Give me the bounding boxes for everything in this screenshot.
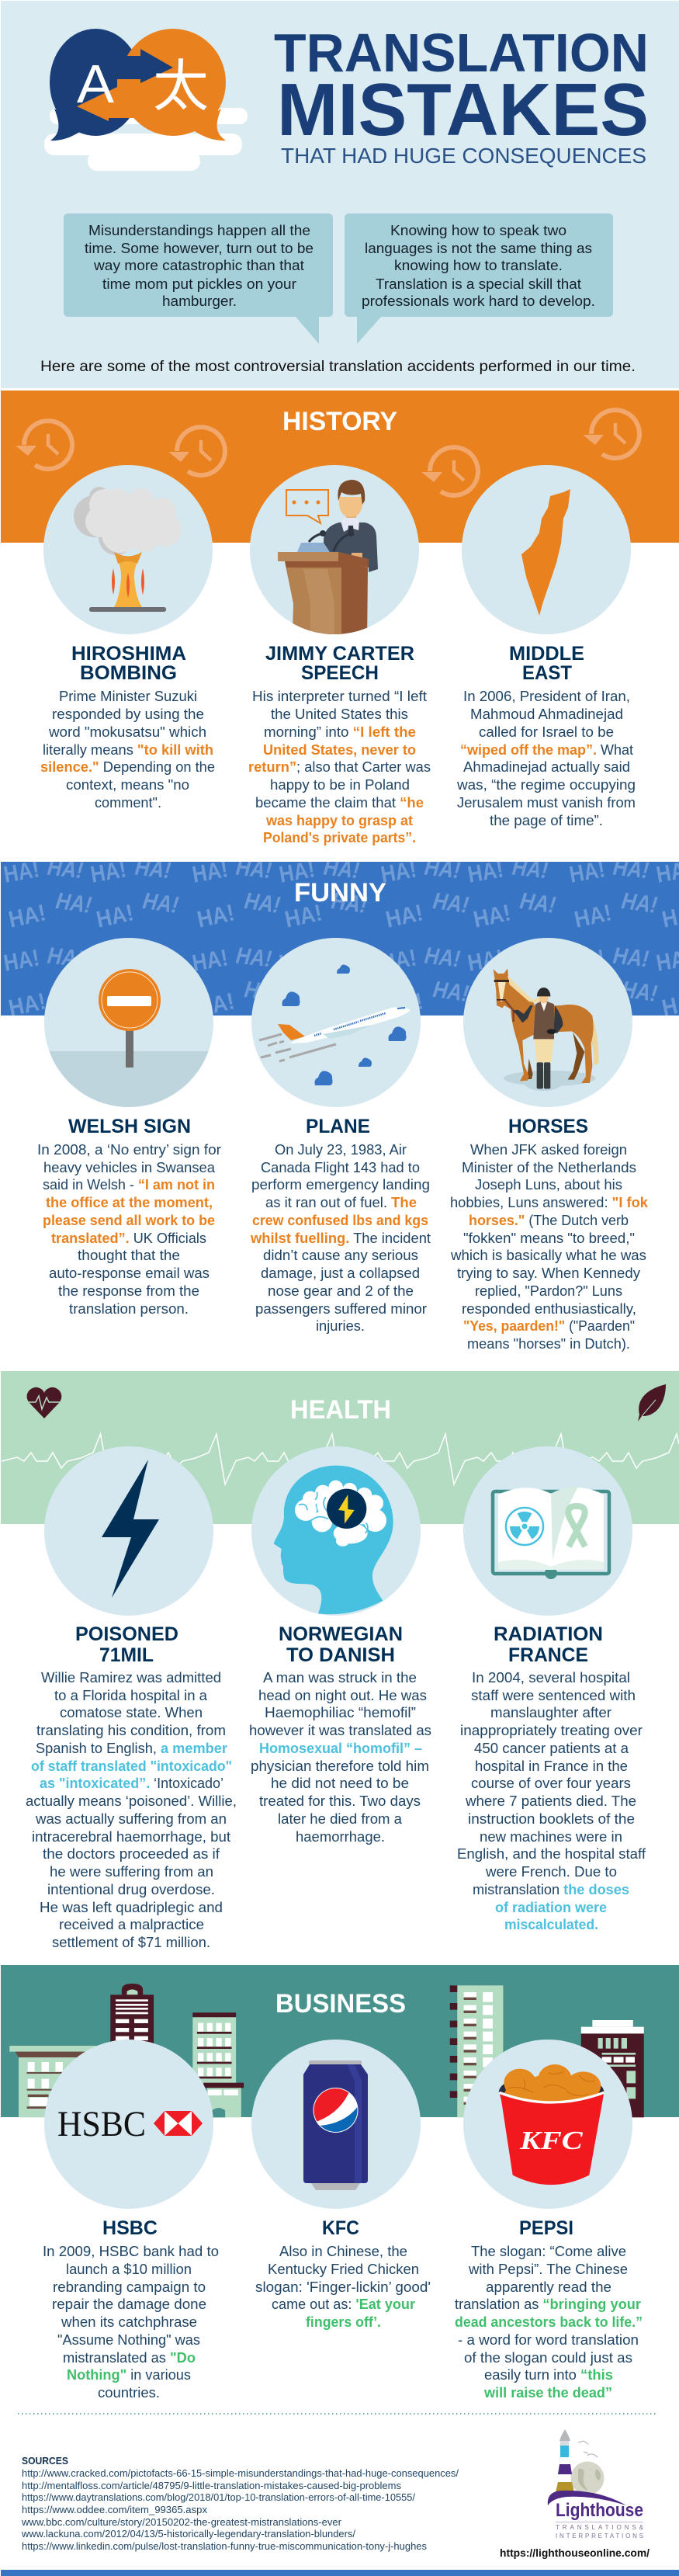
text: Norwegian to Danish: treated for this. Two days xyxy=(259,1793,421,1809)
icon: KFC bucket: KFC xyxy=(519,2126,584,2155)
icon: translation speech bubbles: A xyxy=(77,54,114,114)
title: THAT HAD HUGE CONSEQUENCES xyxy=(281,144,646,168)
heading: Norwegian to Danish xyxy=(279,1623,403,1666)
text: Plane: passengers suffered minor xyxy=(255,1301,427,1317)
text: Poisoned 71mil: Spanish to English, a member xyxy=(36,1741,227,1756)
text: Pepsi: apparently read the xyxy=(486,2279,611,2295)
text: Plane: Canada Flight 143 had to xyxy=(261,1160,420,1175)
sources list: http://www.cracked.com/pictofacts-66-15-simple-misunderstandings-that-had-huge-consequences/ xyxy=(22,2468,459,2479)
text: KFC: Kentucky Fried Chicken xyxy=(268,2262,419,2277)
text: Horses: hobbies, Luns answered: "I fok xyxy=(450,1195,649,1210)
text: KFC xyxy=(255,2244,431,2330)
icon: heart with pulse xyxy=(27,1387,61,1418)
text: HSBC xyxy=(43,2244,219,2401)
text: Pepsi: - a word for word translation xyxy=(458,2332,639,2348)
text: Poisoned 71mil: of staff translated "intoxicado" xyxy=(31,1758,232,1774)
sources list: https://www.oddee.com/item_99365.aspx xyxy=(22,2505,208,2515)
heading: Hiroshima bombing: HIROSHIMA xyxy=(71,643,186,665)
text: Radiation France: English, and the hospital staff xyxy=(457,1846,646,1862)
text: Middle East: Mahmoud Ahmadinejad xyxy=(470,706,623,722)
heading: Middle East: MIDDLE xyxy=(509,643,584,665)
business band xyxy=(1,1965,679,2117)
text: Plane: On July 23, 1983, Air xyxy=(275,1142,407,1158)
text: Poisoned 71mil: the doctors proceeded as if xyxy=(43,1846,220,1862)
text: Poisoned 71mil: to a Florida hospital in a xyxy=(54,1688,208,1703)
callout: misunderstandings xyxy=(64,214,333,344)
text: Welsh sign: auto-response email was xyxy=(49,1265,210,1281)
icon: translation speech bubbles: 太 xyxy=(153,56,209,118)
text: Pepsi: dead ancestors back to life.” xyxy=(455,2314,643,2330)
text: Poisoned 71mil: settlement of $71 million. xyxy=(52,1935,210,1950)
text: Radiation France xyxy=(457,1670,646,1932)
text: Norwegian to Danish: A man was struck in the xyxy=(263,1670,417,1686)
text: Poisoned 71mil xyxy=(26,1670,237,1950)
health band xyxy=(1,1371,679,1524)
text: Welsh sign: thought that the xyxy=(78,1248,180,1263)
heading: Plane: PLANE xyxy=(306,1116,370,1137)
text: Horses: "fokken" means "to breed," xyxy=(463,1231,635,1246)
text: Norwegian to Danish: Haemophiliac “hemofil” xyxy=(265,1705,416,1720)
text: Radiation France: 450 cancer patients at a xyxy=(474,1741,629,1756)
text: Radiation France: manslaughter after xyxy=(490,1705,611,1720)
text: HSBC: when its catchphrase xyxy=(61,2314,197,2330)
sources list: http://mentalfloss.com/article/48795/9-little-translation-mistakes-caused-big-problems xyxy=(22,2481,401,2491)
text: Middle East xyxy=(456,689,636,828)
text: Welsh sign xyxy=(37,1142,221,1317)
text: Norwegian to Danish: haemorrhage. xyxy=(296,1829,385,1845)
icon: HSBC logo: HSBC xyxy=(57,2104,146,2144)
heading: Poisoned 71mil: POISONED xyxy=(75,1623,178,1645)
text: Hiroshima bombing: responded by using the xyxy=(52,706,204,722)
text: HSBC: launch a $10 million xyxy=(66,2262,192,2277)
text: Radiation France: mistranslation the doses xyxy=(473,1882,629,1897)
icon: map of Israel xyxy=(462,465,631,634)
text: Horses: means "horses" in Dutch). xyxy=(467,1336,630,1352)
heading: Horses: HORSES xyxy=(508,1116,588,1137)
callout: knowing two languages: Translation is a special skill that xyxy=(376,276,581,292)
text: Jimmy Carter speech xyxy=(248,689,431,845)
text: Jimmy Carter speech: became the claim that “he xyxy=(255,795,424,811)
text: Poisoned 71mil: intentional drug overdose. xyxy=(47,1882,215,1897)
icon: plane and clouds xyxy=(251,938,421,1107)
header background xyxy=(1,1,679,388)
text: Horses: "Yes, paarden!" ("Paarden" xyxy=(463,1318,635,1334)
text: Norwegian to Danish: physician therefore told him xyxy=(251,1758,429,1774)
text: Radiation France: of radiation were xyxy=(495,1900,607,1915)
heading: Hiroshima bombing: BOMBING xyxy=(80,662,177,684)
text: Welsh sign: heavy vehicles in Swansea xyxy=(43,1160,216,1175)
text: HSBC: In 2009, HSBC bank had to xyxy=(43,2244,219,2259)
callout: knowing two languages xyxy=(345,214,613,344)
title: MISTAKES xyxy=(277,68,649,151)
sources list: www.bbc.com/culture/story/20150202-the-greatest-mistranslations-ever xyxy=(21,2517,341,2528)
panel: history xyxy=(1,391,679,845)
icon: speaker at podium xyxy=(250,465,419,644)
text: Poisoned 71mil: was actually suffering from an xyxy=(35,1811,227,1827)
text: Horses: Minister of the Netherlands xyxy=(462,1160,636,1175)
health heading: HEALTH xyxy=(290,1395,391,1425)
callout: knowing two languages: knowing how to translate. xyxy=(394,258,563,273)
text: Jimmy Carter speech: return”; also that Carter was xyxy=(248,759,431,775)
logo: Lighthouse Translations and Interpretations: TRANSLATIONS& xyxy=(556,2524,644,2531)
business heading: BUSINESS xyxy=(275,1989,406,2019)
logo: Lighthouse Translations and Interpretations: Lighthouse xyxy=(556,2500,643,2521)
text: Welsh sign: said in Welsh - “I am not in xyxy=(43,1177,215,1193)
icon: HSBC logo xyxy=(44,2040,213,2209)
text: Welsh sign: please send all work to be xyxy=(43,1213,215,1228)
text: Poisoned 71mil: he were suffering from an xyxy=(50,1864,213,1880)
heading: Norwegian to Danish: NORWEGIAN xyxy=(279,1623,403,1645)
text: Hiroshima bombing: silence." Depending on the xyxy=(40,759,215,775)
text: Hiroshima bombing: word "mokusatsu" which xyxy=(48,724,206,740)
icon: no entry sign xyxy=(39,938,219,1113)
text: Jimmy Carter speech: was happy to grasp at xyxy=(265,813,413,828)
text: Radiation France: new machines were in xyxy=(480,1829,622,1845)
text: Poisoned 71mil: comatose state. When xyxy=(60,1705,203,1720)
text: HSBC: mistranslated as "Do xyxy=(63,2350,196,2366)
icon: mushroom cloud xyxy=(43,465,213,634)
text: Radiation France: In 2004, several hospital xyxy=(472,1670,630,1686)
text: Radiation France: where 7 patients died. The xyxy=(465,1793,636,1809)
text: Radiation France: miscalculated. xyxy=(504,1917,598,1932)
callout: misunderstandings: time. Some however, turn out to be xyxy=(85,241,314,256)
text: Welsh sign: the office at the moment, xyxy=(46,1195,213,1210)
icon: head with brain xyxy=(251,1446,421,1616)
icon: lightning bolt xyxy=(44,1446,213,1616)
text: Radiation France: course of over four years xyxy=(471,1776,631,1791)
text: Poisoned 71mil: He was left quadriplegic and xyxy=(40,1900,223,1915)
text: Poisoned 71mil: Willie Ramirez was admitted xyxy=(41,1670,221,1686)
text: KFC: came out as: 'Eat your xyxy=(272,2297,415,2312)
text: Middle East: Jerusalem must vanish from xyxy=(457,795,636,811)
buildings skyline xyxy=(9,1984,644,2117)
text: Plane: whilst fuelling. The incident xyxy=(250,1231,431,1246)
sources list: https://www.linkedin.com/pulse/lost-translation-funny-true-miscommunication-tony-j-hughes xyxy=(22,2541,427,2552)
title xyxy=(274,23,649,168)
panel: funny xyxy=(1,862,679,1352)
text: Horses: When JFK asked foreign xyxy=(470,1142,627,1158)
text: Norwegian to Danish: however it was translated as xyxy=(249,1723,431,1738)
text: Pepsi: translation as “bringing your xyxy=(455,2297,641,2312)
icon: Pepsi can xyxy=(251,2040,421,2209)
text: Plane: as it ran out of fuel. The xyxy=(265,1195,417,1210)
text: Norwegian to Danish: he did not need to be xyxy=(271,1776,409,1791)
icon: horse and rider xyxy=(463,938,632,1107)
text: Welsh sign: the response from the xyxy=(58,1283,199,1299)
heading: KFC: KFC xyxy=(322,2217,359,2239)
text: Welsh sign: In 2008, a ‘No entry’ sign for xyxy=(37,1142,221,1158)
text: Middle East: was, “the regime occupying xyxy=(456,777,636,793)
text: Radiation France: were French. Due to xyxy=(485,1864,617,1880)
footer band xyxy=(1,2570,679,2576)
text: Hiroshima bombing: context, means "no xyxy=(66,777,189,793)
heading: Middle East: EAST xyxy=(522,662,572,684)
icon: KFC bucket xyxy=(463,2040,632,2209)
text: Norwegian to Danish xyxy=(249,1670,431,1845)
text: Hiroshima bombing: Prime Minister Suzuki xyxy=(59,689,197,704)
text: Horses: horses." (The Dutch verb xyxy=(469,1213,629,1228)
sources list: SOURCES xyxy=(22,2455,68,2467)
text: HSBC: rebranding campaign to xyxy=(53,2279,206,2295)
funny heading: FUNNY xyxy=(294,878,386,908)
text: Jimmy Carter speech: United States, never to xyxy=(263,742,416,758)
text: HSBC: Nothing" in various xyxy=(67,2367,191,2383)
text: Norwegian to Danish: later he died from a xyxy=(278,1811,403,1827)
text: Radiation France: hospital in France in the xyxy=(475,1758,628,1774)
text: Horses xyxy=(450,1142,649,1352)
heading: Poisoned 71mil xyxy=(75,1623,178,1666)
heading: Jimmy Carter speech: SPEECH xyxy=(301,662,379,684)
text: Horses: replied, "Pardon?" Luns xyxy=(475,1283,622,1299)
heading: Poisoned 71mil: 71MIL xyxy=(99,1644,154,1666)
heading: Radiation France: RADIATION xyxy=(494,1623,603,1645)
text: Horses: which is basically what he was xyxy=(450,1248,646,1263)
text: Poisoned 71mil: intracerebral haemorrhage, but xyxy=(32,1829,230,1845)
text: Poisoned 71mil: as "intoxicated”. ‘Intoxicado’ xyxy=(40,1776,223,1791)
text: Radiation France: instruction booklets of the xyxy=(468,1811,635,1827)
text: KFC: Also in Chinese, the xyxy=(279,2244,407,2259)
text: Plane: nose gear and 2 of the xyxy=(268,1283,414,1299)
title: TRANSLATION xyxy=(274,23,649,83)
logo: Lighthouse Translations and Interpretations: INTERPRETATIONS xyxy=(556,2533,643,2540)
heading: HSBC: HSBC xyxy=(102,2217,158,2239)
heading: Middle East xyxy=(509,643,584,684)
callout: misunderstandings: hamburger. xyxy=(162,293,237,309)
text: Middle East: In 2006, President of Iran, xyxy=(463,689,630,704)
panel: health xyxy=(1,1371,679,1950)
icon: open book xyxy=(463,1446,632,1616)
text: HSBC: repair the damage done xyxy=(52,2297,206,2312)
text: Jimmy Carter speech: Poland's private parts”. xyxy=(263,830,416,845)
text: Pepsi: will raise the dead” xyxy=(483,2385,612,2401)
text: Poisoned 71mil: actually means ‘poisoned’. Willie, xyxy=(26,1793,237,1809)
heading: Welsh sign: WELSH SIGN xyxy=(68,1116,191,1137)
text: Plane: damage, just a collapsed xyxy=(261,1265,420,1281)
text: Welsh sign: translation person. xyxy=(69,1301,189,1317)
history heading: HISTORY xyxy=(282,407,397,436)
callout: misunderstandings: way more catastrophic than that xyxy=(93,258,304,273)
logo: Lighthouse Translations and Interpretations xyxy=(548,2429,644,2540)
icon: history clocks xyxy=(16,410,639,495)
callout: misunderstandings: time mom put pickles on your xyxy=(102,276,296,292)
text: Horses: trying to say. When Kennedy xyxy=(457,1265,640,1281)
text: HSBC: countries. xyxy=(98,2385,160,2401)
text: Plane xyxy=(250,1142,431,1334)
text: Middle East: the page of time”. xyxy=(490,813,603,828)
text: Radiation France: inappropriately treating over xyxy=(460,1723,643,1738)
callout: knowing two languages: professionals work hard to develop. xyxy=(362,293,595,309)
text: Middle East: “wiped off the map”. What xyxy=(460,742,633,758)
heading: Norwegian to Danish: TO DANISH xyxy=(286,1644,395,1666)
text: Horses: Joseph Luns, about his xyxy=(475,1177,622,1193)
text: Middle East: called for Israel to be xyxy=(479,724,614,740)
text: Poisoned 71mil: translating his condition, from xyxy=(36,1723,226,1738)
heading: Jimmy Carter speech xyxy=(265,643,414,684)
text: Poisoned 71mil: received a malpractice xyxy=(59,1917,204,1932)
text: Norwegian to Danish: head on night out. He was xyxy=(258,1688,427,1703)
text: Jimmy Carter speech: His interpreter turned “I left xyxy=(252,689,427,704)
heading: Hiroshima bombing xyxy=(71,643,186,684)
history band xyxy=(1,391,679,543)
text: Radiation France: staff were sentenced with xyxy=(471,1688,636,1703)
heading: Radiation France xyxy=(494,1623,603,1666)
callout: misunderstandings: Misunderstandings happen all the xyxy=(88,223,310,238)
text: KFC: fingers off’. xyxy=(306,2314,381,2330)
heading: Pepsi: PEPSI xyxy=(519,2217,573,2239)
text: Hiroshima bombing xyxy=(40,689,215,811)
text: Hiroshima bombing: literally means "to kill with xyxy=(43,742,213,758)
text: Plane: crew confused lbs and kgs xyxy=(252,1213,428,1228)
intro sentence: Here are some of the most controversial translation accidents performed in our time. xyxy=(40,359,636,375)
text: Plane: injuries. xyxy=(316,1318,365,1334)
text: Pepsi xyxy=(455,2244,643,2401)
text: HSBC: "Assume Nothing" was xyxy=(57,2332,200,2348)
icon: leaf xyxy=(638,1384,666,1422)
text: Hiroshima bombing: comment". xyxy=(95,795,161,811)
heading: Jimmy Carter speech: JIMMY CARTER xyxy=(265,643,414,665)
text: Horses: responded enthusiastically, xyxy=(462,1301,636,1317)
text: Jimmy Carter speech: happy to be in Poland xyxy=(270,777,410,793)
callout: knowing two languages: languages is not the same thing as xyxy=(365,241,592,256)
text: Middle East: Ahmadinejad actually said xyxy=(463,759,630,775)
text: Welsh sign: translated”. UK Officials xyxy=(51,1231,206,1246)
text: Pepsi: The slogan: “Come alive xyxy=(471,2244,626,2259)
sources list: www.lackuna.com/2012/04/13/5-historically-legendary-translation-blunders/ xyxy=(21,2529,356,2540)
text: Jimmy Carter speech: morning” into “I left the xyxy=(264,724,416,740)
heartbeat line xyxy=(2,1434,679,1484)
website link: https://lighthouseonline.com/ xyxy=(500,2546,650,2559)
text: KFC: slogan: 'Finger-lickin’ good' xyxy=(255,2279,431,2295)
text: Norwegian to Danish: Homosexual “homofil” – xyxy=(259,1741,422,1756)
sources list xyxy=(21,2455,459,2552)
icon: translation speech bubbles xyxy=(44,29,248,171)
heading: Radiation France: FRANCE xyxy=(508,1644,588,1666)
text: Pepsi: with Pepsi”. The Chinese xyxy=(468,2262,628,2277)
panel: business xyxy=(1,1965,679,2401)
funny band xyxy=(1,862,679,1015)
sources list: https://www.daytranslations.com/blog/2018/01/top-10-translation-errors-of-all-time-10555/ xyxy=(22,2492,416,2503)
text: Plane: perform emergency landing xyxy=(251,1177,430,1193)
callout: knowing two languages: Knowing how to speak two xyxy=(390,223,566,238)
text: Pepsi: easily turn into “this xyxy=(484,2367,613,2383)
text: Pepsi: of the slogan could just as xyxy=(464,2350,632,2366)
text: Plane: didn’t cause any serious xyxy=(263,1248,418,1263)
text: Jimmy Carter speech: the United States this xyxy=(271,706,408,722)
